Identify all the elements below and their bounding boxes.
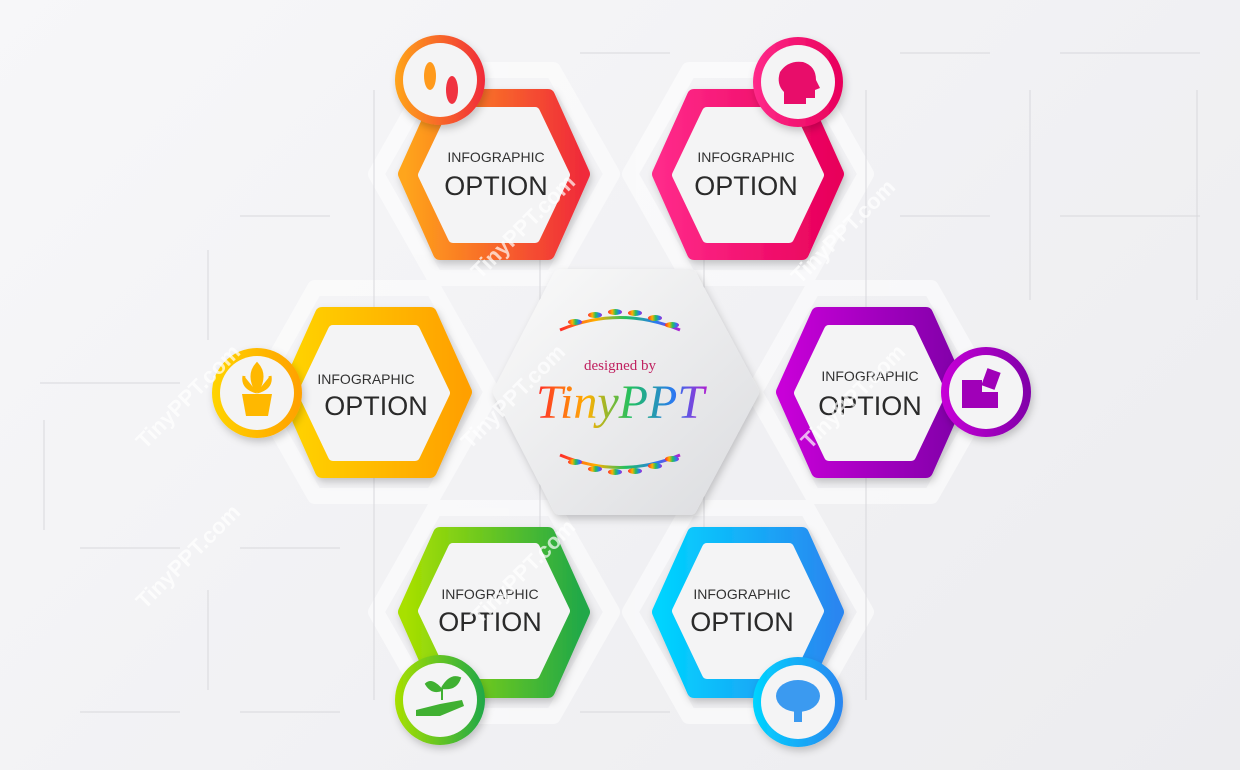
watermark: TinyPPT.com <box>131 499 245 614</box>
watermark: TinyPPT.com <box>796 339 910 454</box>
option: pink top-right: OPTION <box>694 171 798 201</box>
option: yellow middle-left <box>287 314 465 471</box>
option: orange top-left: OPTION <box>444 171 548 201</box>
option: orange top-left: INFOGRAPHIC <box>447 149 545 165</box>
watermark <box>131 169 910 629</box>
icon: feet <box>395 35 485 125</box>
logo text: designed by <box>584 358 657 374</box>
icon: puzzle <box>941 347 1031 437</box>
option: green bottom-left: OPTION <box>438 607 542 637</box>
option: green bottom-left <box>405 534 583 691</box>
center logo hexagon: TinyPPT <box>536 376 707 429</box>
watermark: TinyPPT.com <box>456 339 570 454</box>
logo: leaves <box>560 318 680 468</box>
option: blue bottom-right: OPTION <box>690 607 794 637</box>
option: purple middle-right: INFOGRAPHIC <box>821 368 919 384</box>
option: purple middle-right: OPTION <box>818 391 922 421</box>
option: purple middle-right <box>783 314 961 471</box>
background network <box>256 70 990 716</box>
icon: head <box>753 37 843 127</box>
icon: hand with plant <box>395 655 485 745</box>
watermark: TinyPPT.com <box>466 514 580 629</box>
option: yellow middle-left: OPTION <box>324 391 428 421</box>
watermark: TinyPPT.com <box>131 339 245 454</box>
option: pink top-right <box>659 96 837 253</box>
option: blue bottom-right: INFOGRAPHIC <box>693 586 791 602</box>
option: blue bottom-right <box>659 534 837 691</box>
center logo hexagon <box>500 276 752 508</box>
option: yellow middle-left: INFOGRAPHIC <box>317 371 415 387</box>
watermark: TinyPPT.com <box>466 169 580 284</box>
option: orange top-left <box>405 96 583 253</box>
watermark: TinyPPT.com <box>786 174 900 289</box>
option: pink top-right: INFOGRAPHIC <box>697 149 795 165</box>
option: green bottom-left: INFOGRAPHIC <box>441 586 539 602</box>
icon: brain <box>753 657 843 747</box>
icon: plant pot <box>212 348 302 438</box>
